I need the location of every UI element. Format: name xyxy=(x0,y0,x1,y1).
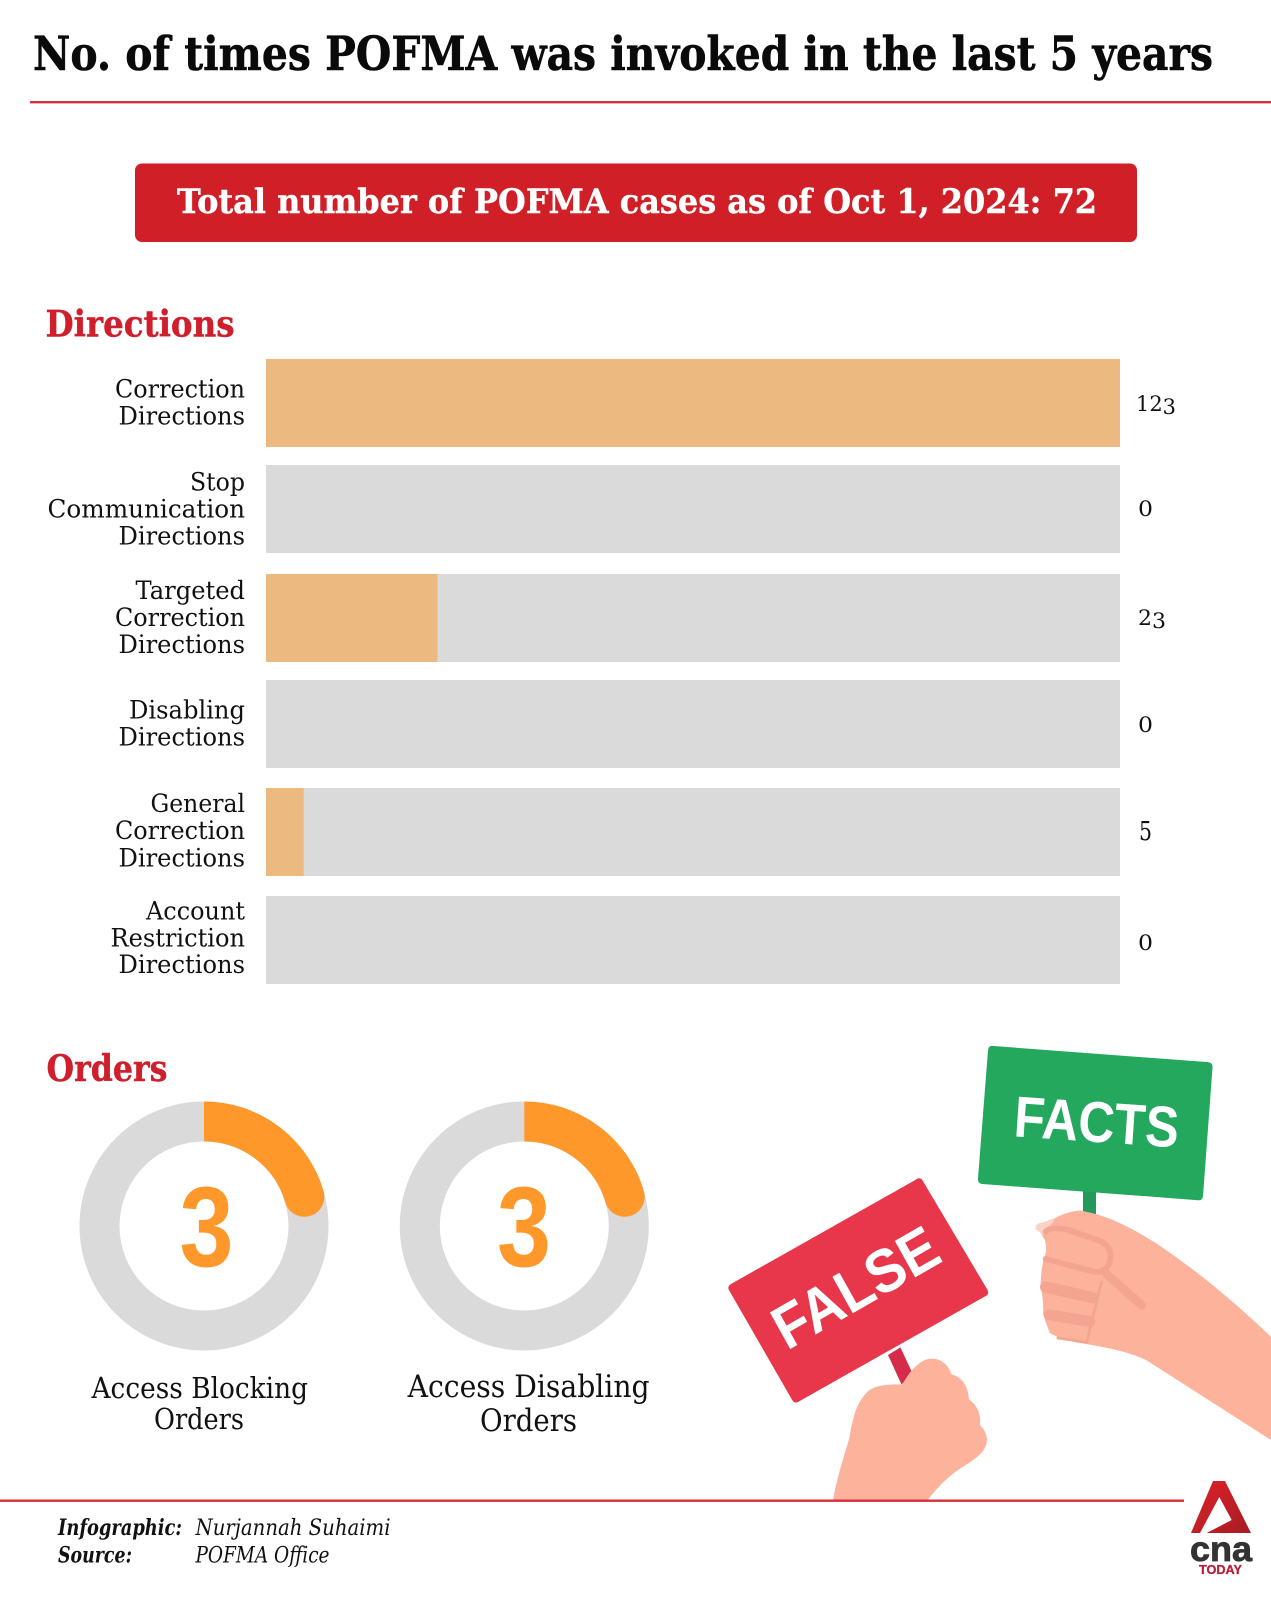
logo: cna today: cna xyxy=(1190,1530,1253,1569)
row: targeted correction directions xyxy=(115,574,1166,662)
row: general correction directions: 5 xyxy=(1139,817,1152,847)
icon: facts sign: FACTS xyxy=(1012,1085,1181,1161)
bar chart: directions xyxy=(48,359,1176,984)
row: targeted correction directions: Targeted xyxy=(136,576,245,605)
credits: Infographic: xyxy=(57,1515,182,1541)
row: general correction directions xyxy=(115,788,1152,876)
row: disabling directions: Directions xyxy=(118,722,245,751)
row: general correction directions: General xyxy=(150,789,245,818)
row: targeted correction directions: 3 xyxy=(1152,609,1166,633)
row: disabling directions: Disabling xyxy=(129,695,245,724)
row: account restriction directions xyxy=(110,896,1153,984)
icon: facts sign xyxy=(978,1046,1213,1218)
row: stop communication directions: Stop xyxy=(190,467,245,496)
row: general correction directions: Directions xyxy=(118,843,245,872)
icon: false sign xyxy=(728,1178,988,1403)
icon: left hand xyxy=(833,1359,987,1500)
heading: directions: Directions xyxy=(46,304,234,346)
row: correction directions: Correction xyxy=(115,374,245,403)
row: correction directions xyxy=(115,359,1176,447)
row: account restriction directions: Directions xyxy=(118,950,245,979)
icon: right hand xyxy=(1035,1211,1271,1440)
row: targeted correction directions: Correction xyxy=(115,603,245,632)
row: disabling directions: 0 xyxy=(1138,713,1153,737)
donut: access disabling orders: 3 xyxy=(497,1164,551,1291)
row: stop communication directions xyxy=(48,465,1153,553)
row: general correction directions: Correction xyxy=(115,816,245,845)
illustration: hands holding signs xyxy=(728,1046,1271,1500)
row: stop communication directions: 0 xyxy=(1138,497,1153,521)
row: account restriction directions: Account xyxy=(145,896,245,925)
row: correction directions: 12 xyxy=(1136,392,1163,416)
logo: cna today xyxy=(1190,1481,1253,1577)
row: correction directions: Directions xyxy=(118,401,245,430)
credits: Nurjannah Suhaimi xyxy=(195,1516,390,1541)
footer divider xyxy=(0,1500,1184,1502)
credits: POFMA Office xyxy=(195,1544,330,1568)
row: account restriction directions: Restriction xyxy=(110,923,245,952)
icon: false sign: FALSE xyxy=(760,1212,951,1362)
donut: access blocking orders: Orders xyxy=(154,1402,244,1436)
total cases banner xyxy=(135,164,1137,242)
donut: access disabling orders: Access Disabling xyxy=(407,1369,650,1405)
donut: access disabling orders xyxy=(407,1122,650,1439)
row: stop communication directions: Communication xyxy=(48,494,245,523)
row: stop communication directions: Directions xyxy=(118,521,245,550)
row: disabling directions xyxy=(118,680,1153,768)
heading: orders: Orders xyxy=(46,1048,168,1090)
credits: Source: xyxy=(58,1542,132,1568)
row: account restriction directions: 0 xyxy=(1138,931,1153,955)
total cases banner: Total number of POFMA cases as of Oct 1, 2024: 72 xyxy=(177,182,1097,222)
donut: access disabling orders: Orders xyxy=(480,1403,577,1439)
donut: access blocking orders: Access Blocking xyxy=(91,1371,308,1405)
logo: cna today: TODAY xyxy=(1199,1562,1242,1577)
row: targeted correction directions: Directions xyxy=(118,630,245,659)
row: correction directions: 3 xyxy=(1163,395,1176,419)
donut: access blocking orders: 3 xyxy=(180,1164,234,1291)
credits xyxy=(57,1515,390,1568)
row: targeted correction directions: 2 xyxy=(1138,606,1151,630)
donut: access blocking orders xyxy=(91,1122,324,1436)
